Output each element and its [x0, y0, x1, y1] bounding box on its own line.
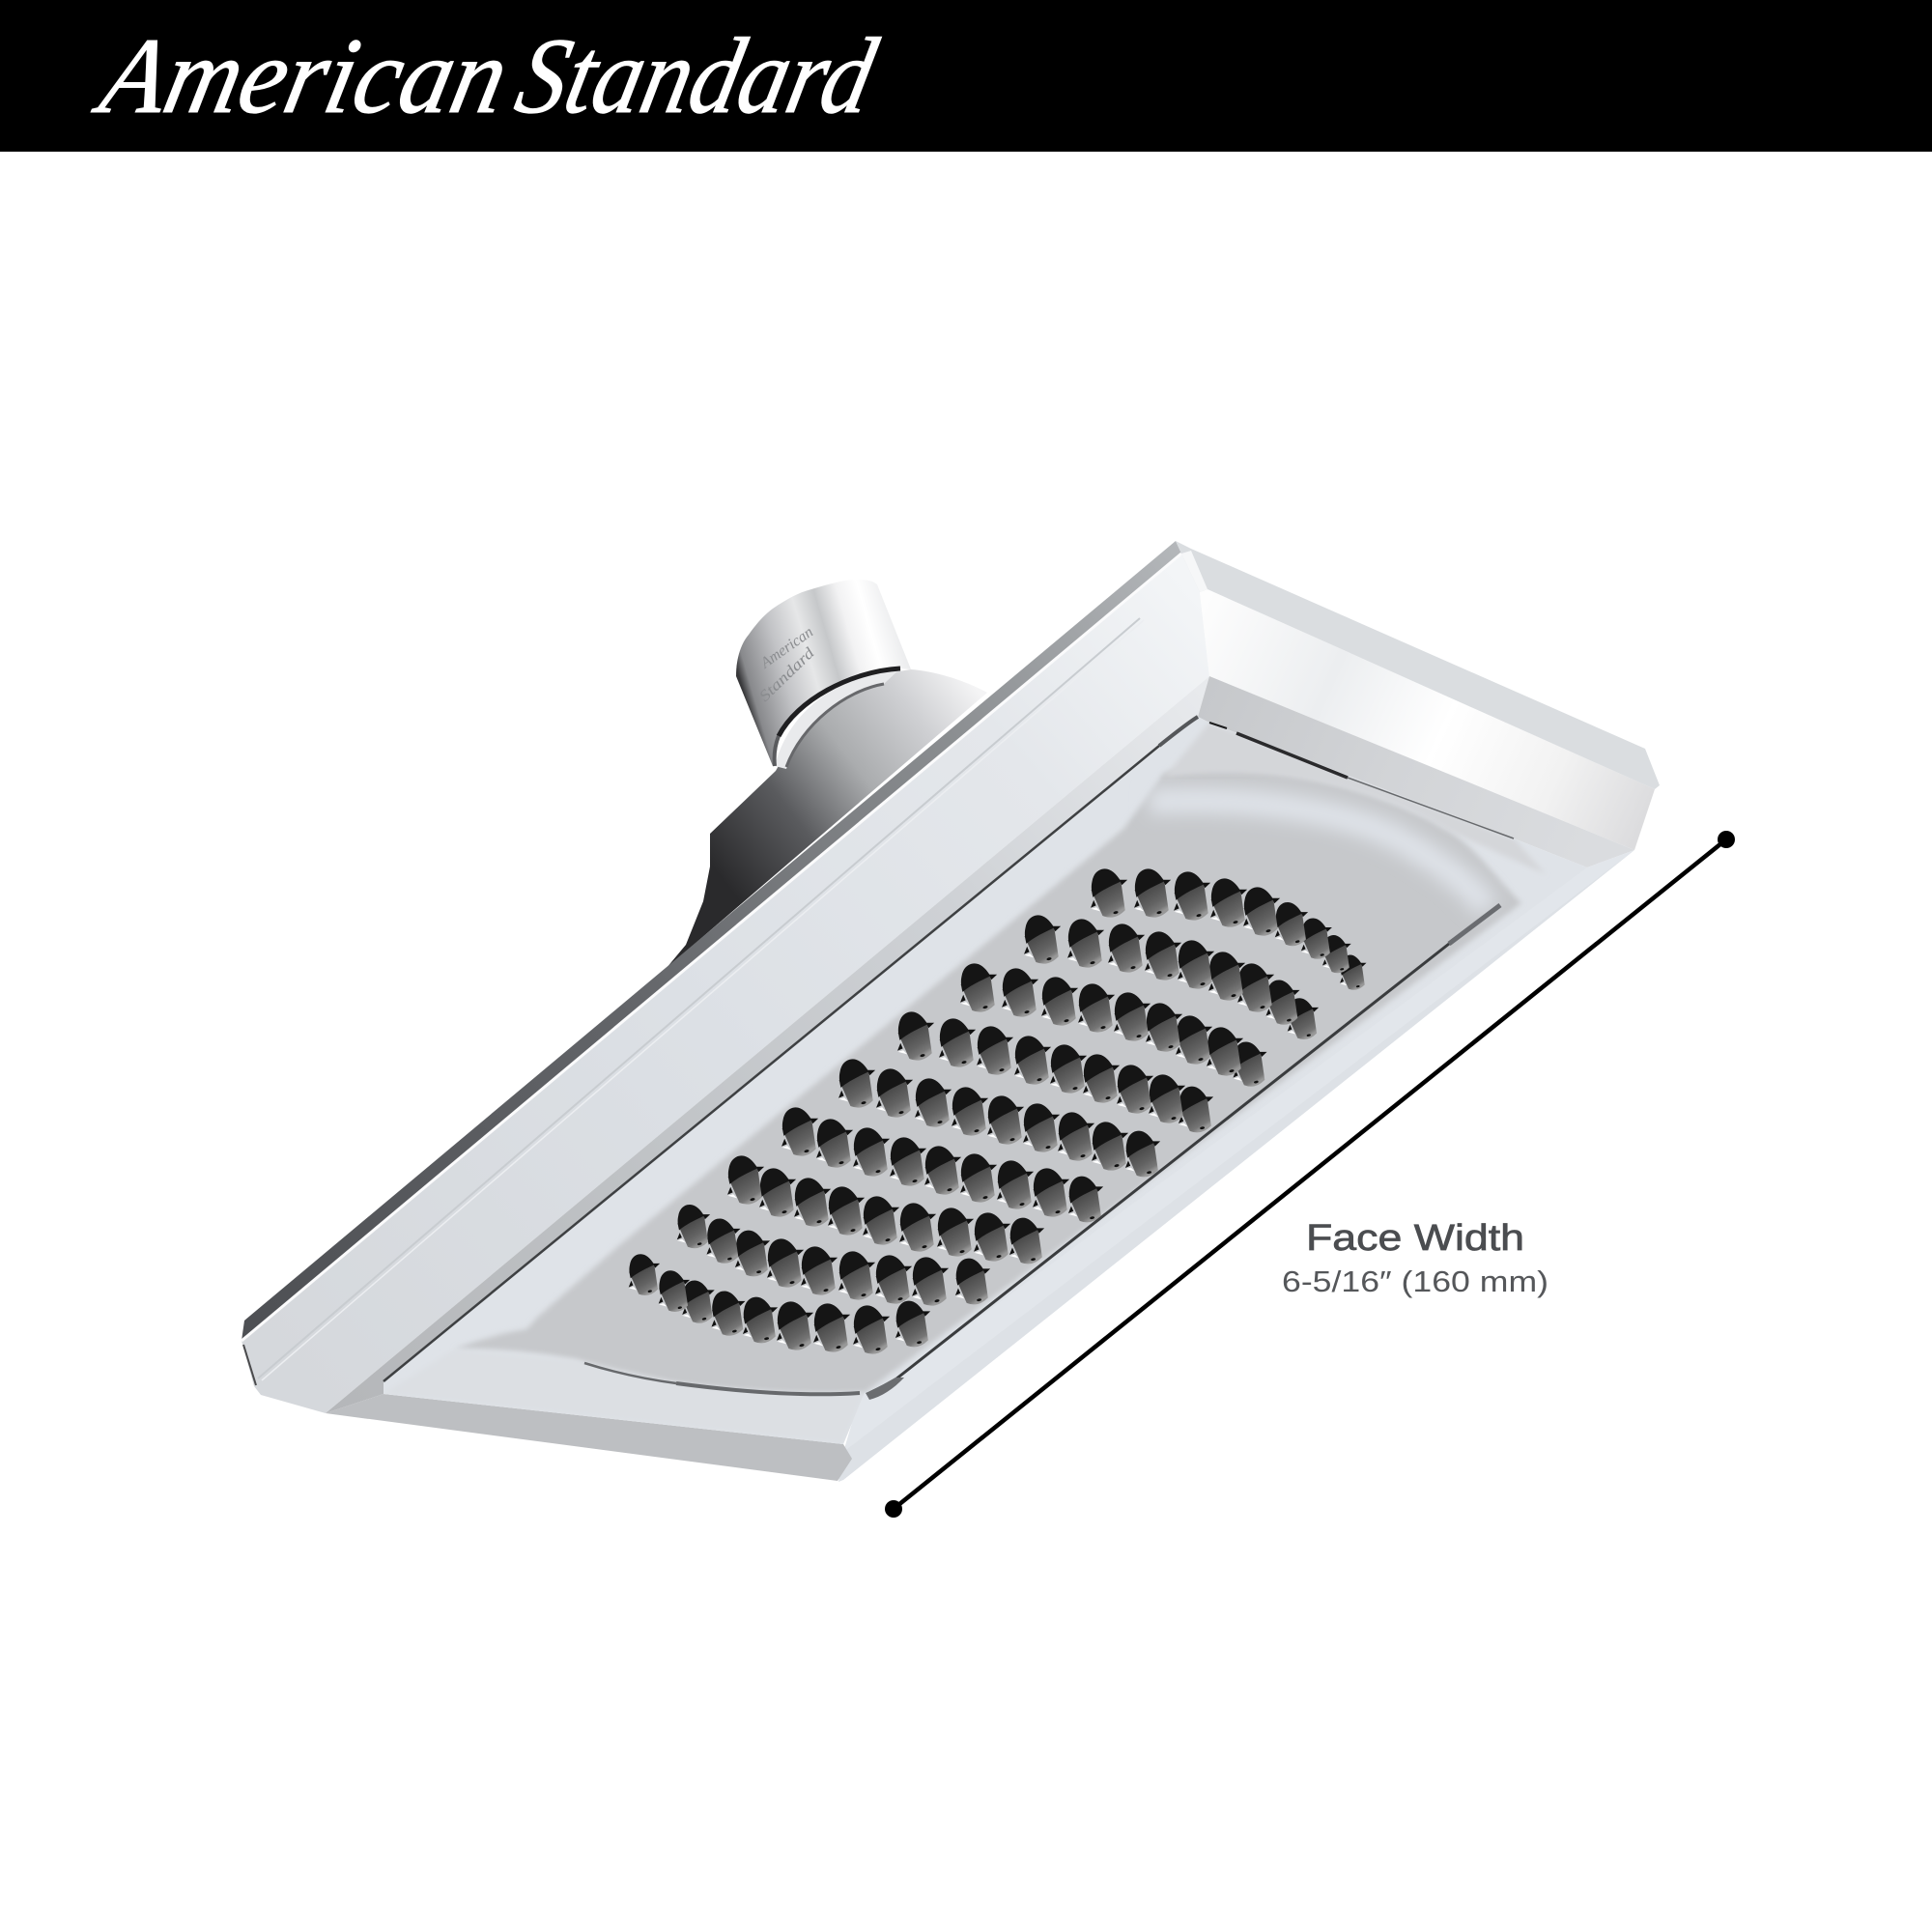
top-right frame face: [1176, 541, 1660, 850]
nozzle row 5: [830, 1054, 1168, 1181]
header band: [0, 0, 1932, 152]
recess dark edge lines: [384, 717, 1514, 1400]
label value: 6-5/16 in (160 mm): 6-5/16″ (160 mm): [1282, 1264, 1548, 1298]
nozzle row 1: [1082, 864, 1372, 993]
top-left frame band: [242, 554, 1209, 1413]
nozzle row 9: [621, 1250, 938, 1358]
nozzle row 2: [1015, 910, 1325, 1043]
nozzle row 8: [669, 1200, 998, 1310]
plate upper shade: [1164, 723, 1546, 874]
nozzle row 7: [719, 1151, 1052, 1268]
bottom light band: [589, 1362, 653, 1378]
logo: American Standard: [85, 16, 887, 136]
plate grey panel: [454, 767, 1521, 1394]
collar engraving: [756, 624, 818, 705]
nozzle row 6: [773, 1102, 1111, 1227]
back edge strip: [242, 541, 1181, 1341]
shower arm collar: [736, 580, 911, 769]
recess slope: [1198, 676, 1634, 867]
bottom-right frame band: [838, 850, 1634, 1482]
collar ring: [775, 668, 900, 769]
nozzle row 4: [889, 1007, 1221, 1137]
nozzle row 3: [952, 958, 1274, 1091]
mounting bracket: [667, 669, 987, 968]
collar engraving: Standard: [756, 644, 818, 705]
frame fold strip beside plate: [326, 676, 1209, 1413]
logo: American Standard: American: [85, 16, 519, 136]
dimension label: [1282, 1218, 1548, 1298]
bottom frame band: [326, 1394, 852, 1481]
dimension line with end dots: [885, 831, 1735, 1518]
collar engraving: American: [757, 624, 816, 672]
label heading: Face Width: Face Width: [1306, 1218, 1524, 1259]
product: rectangular shower head: [242, 541, 1660, 1482]
logo: American Standard: Standard: [506, 16, 887, 136]
nozzle grid: [621, 864, 1372, 1358]
arch highlight: [1150, 801, 1488, 908]
recessed plate: [367, 696, 1623, 1468]
